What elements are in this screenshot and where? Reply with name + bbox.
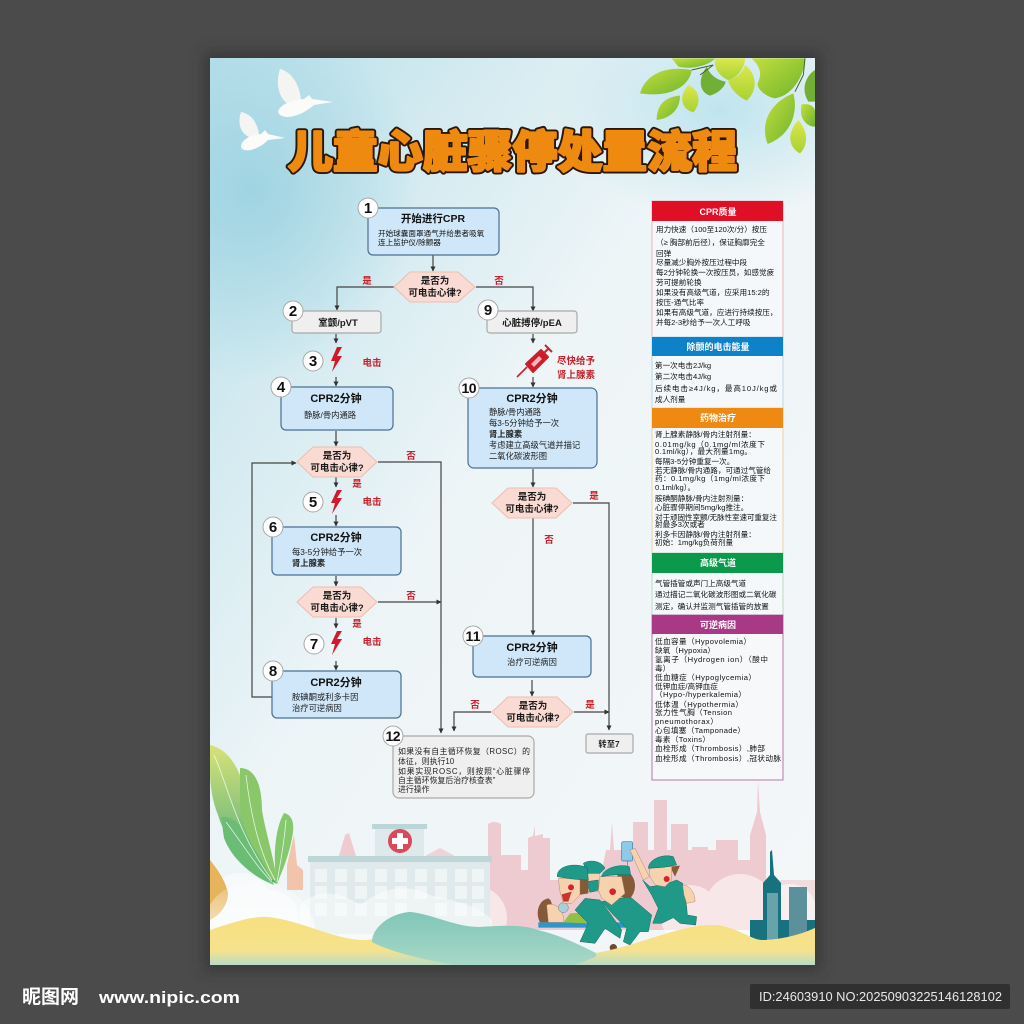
panel: reversible causes: （Hypo-/hyperkalemia） (655, 690, 746, 699)
panel: reversible causes: 可逆病因 (700, 619, 736, 630)
decision 4: 是 (589, 491, 599, 502)
step 12: ROSC: 进行操作 (398, 784, 430, 794)
decision 5: 否 (470, 700, 480, 711)
medic left: legs and torso (575, 898, 622, 943)
panel: shock energy (652, 337, 783, 408)
scene: green plant (210, 745, 293, 885)
step 3: shock: 电击 (362, 357, 382, 369)
panel: reversible causes: 心包填塞（Tamponade） (655, 725, 745, 735)
panel: CPR quality: 劳可提前轮换 (656, 277, 702, 287)
step 8: CPR: 胺碘酮或利多卡因 (292, 692, 358, 702)
step 9: asystole/PEA (478, 300, 577, 333)
step 8: CPR: 治疗可逆病因 (292, 703, 342, 713)
scene: hospital haze (300, 888, 492, 945)
panel: shock energy: 第二次电击4J/kg (655, 371, 711, 381)
step 3: shock (303, 347, 382, 372)
panel: drug therapy: 利多卡因静脉/骨内注射剂量： (655, 529, 756, 539)
step 1: start CPR: 1 (364, 200, 372, 217)
decision 1: 是 (362, 276, 372, 287)
panel: CPR quality: （≥ 胸部前后径），保证胸廓完全 (656, 237, 765, 247)
step 1: start CPR: 开始进行CPR (401, 212, 466, 225)
panel: shock energy: 除颤的电击能量 (686, 341, 750, 352)
title: 儿童心脏骤停处置流程 (288, 128, 737, 177)
panel: advanced airway: 气管插管或声门上高级气道 (655, 578, 747, 588)
scene: hospital (308, 824, 492, 934)
medic middle: legs and torso (602, 897, 652, 945)
panel: CPR quality: 并每2-3秒给予一次人工呼吸 (656, 317, 751, 327)
decision 5: 是 (585, 700, 595, 711)
panel: drug therapy: 0.1ml/kg），最大剂量1mg。 (655, 446, 752, 456)
panel: reversible causes: 缺氧（Hypoxia） (655, 645, 715, 655)
panel: reversible causes (652, 615, 783, 780)
step 7: shock (304, 631, 382, 655)
step 10: CPR: 静脉/骨内通路 (489, 407, 542, 417)
panel: CPR quality (652, 201, 783, 337)
step 2: VF/pVT (283, 301, 381, 333)
panel: reversible causes: 毒） (655, 663, 670, 673)
panel: CPR quality: CPR质量 (699, 206, 737, 217)
decision 2: 否 (406, 451, 416, 462)
scene: foreground yellow hill (596, 925, 815, 956)
decision 1: 是否为 (421, 275, 449, 287)
decision 1 (362, 272, 504, 302)
panel: drug therapy: 0.1ml/kg）。 (655, 483, 695, 492)
panel: CPR quality: 尽量减少胸外按压过程中段 (656, 257, 748, 267)
panel: drug therapy: 药物治疗 (700, 412, 736, 423)
panel: drug therapy: 射最多3次或者 (655, 519, 705, 529)
step 12: ROSC (383, 726, 534, 798)
panel: reversible causes: pneumothorax） (655, 717, 718, 726)
panel: drug therapy: 药：0.1mg/kg（1mg/ml浓度下 (655, 473, 765, 483)
medic right: fist (683, 885, 695, 903)
panel: advanced airway: 高级气道 (700, 557, 736, 568)
decision 3: 是 (352, 619, 362, 630)
scene: medical team with stretcher (538, 842, 697, 951)
panel: drug therapy: 若无静脉/骨内通路，可通过气管给 (655, 465, 771, 475)
step 10: CPR: 考虑建立高级气道并描记 (489, 440, 580, 450)
scene: pink city skyline (339, 780, 815, 930)
step 12: ROSC: 体征，则执行10 (398, 756, 455, 766)
step 11: CPR: 治疗可逆病因 (507, 657, 557, 667)
decision 1: 可电击心律? (408, 287, 462, 299)
decision 2 (297, 447, 416, 490)
step 10: CPR: 肾上腺素 (489, 429, 522, 439)
step 4: CPR: CPR2分钟 (310, 391, 362, 405)
step 11: CPR: CPR2分钟 (506, 640, 558, 654)
step 8: CPR: 8 (269, 663, 277, 680)
step 1: start CPR: 连上监护仪/除颤器 (378, 237, 441, 247)
panel: drug therapy: 每隔3-5分钟重复一次。 (655, 456, 734, 466)
flowchart connectors (252, 255, 609, 733)
step 6: CPR (263, 517, 401, 575)
decision 4: 是否为 (518, 491, 546, 503)
step 1: start CPR: 开始球囊面罩通气并给患者吸氧 (378, 228, 485, 238)
panel: advanced airway (652, 553, 783, 615)
step 6: CPR: 每3-5分钟给予一次 (292, 547, 362, 557)
panel: reversible causes: 血栓形成（Thrombosis）,肺部 (655, 743, 765, 753)
step 9: asystole/PEA: 心脏搏停/pEA (502, 317, 562, 329)
goto 7 box: 转至7 (598, 739, 620, 749)
goto 7 box (586, 734, 633, 753)
title: 儿童心脏骤停处置流程 (288, 128, 737, 177)
scene: orange tower (287, 835, 303, 890)
panel: CPR quality: 如果有高级气道，应进行持续按压， (656, 307, 778, 317)
medic right: head (648, 856, 680, 887)
step 10: CPR: 二氧化碳波形图 (489, 451, 547, 461)
step 12: ROSC: 如果实现ROSC，则按照“心脏骤停 (398, 766, 530, 776)
panel: advanced airway: 通过描记二氧化碳波形图或二氧化碳 (655, 589, 777, 599)
step 12: ROSC: 自主循环恢复后治疗核查表” (398, 775, 496, 785)
panel: drug therapy: 0.01mg/kg（0.1mg/ml浓度下 (655, 439, 765, 449)
panel: advanced airway: 测定，确认并监测气管插管的放置 (655, 601, 769, 611)
step 8: CPR: CPR2分钟 (310, 675, 362, 689)
panel: shock energy: 第一次电击2J/kg (655, 360, 711, 370)
medic left: head (557, 865, 588, 903)
decision 2: 是否为 (323, 450, 351, 462)
panel: reversible causes: 低体温（Hypothermia） (655, 699, 743, 709)
stretcher (538, 922, 627, 928)
panel: CPR quality: 每2分钟轮换一次按压员，如感觉疲 (656, 267, 775, 277)
panel: drug therapy: 心脏骤停期间5mg/kg推注。 (655, 502, 748, 512)
step 7: shock: 电击 (362, 636, 382, 648)
decision 3 (297, 587, 416, 630)
step 5: shock: 5 (309, 494, 317, 511)
step 9: asystole/PEA: 9 (484, 302, 492, 319)
decision 5: 是否为 (519, 700, 547, 712)
step 11: CPR (463, 626, 591, 677)
decoration: green leaves (640, 58, 815, 153)
panel: CPR quality: 按压-通气比率 (656, 297, 704, 307)
callout: give epinephrine (557, 355, 595, 381)
panel: reversible causes: 毒素（Toxins） (655, 734, 710, 744)
decision 3: 否 (406, 591, 416, 602)
callout: give epinephrine: 尽快给予 (557, 355, 595, 367)
scene: left haze (210, 880, 315, 945)
wheel (610, 944, 617, 951)
step 3: shock: 3 (309, 353, 317, 370)
step 5: shock (303, 490, 382, 514)
panel: drug therapy (652, 408, 783, 553)
footer watermark: site logo (22, 986, 240, 1008)
medic right: leg and torso (643, 880, 697, 925)
step 12: ROSC: 如果没有自主循环恢复（ROSC）的 (398, 746, 530, 756)
panel: CPR quality: 用力快速（100至120次/分）按压 (656, 224, 767, 234)
panel: CPR quality: 回弹 (656, 248, 672, 258)
decision 2: 可电击心律? (310, 462, 364, 474)
step 6: CPR: 6 (269, 519, 277, 536)
step 7: shock: 7 (310, 636, 318, 653)
step 11: CPR: 11 (466, 628, 481, 644)
step 10: CPR: CPR2分钟 (506, 391, 558, 405)
medic middle: head (598, 866, 635, 905)
panel: drug therapy: 初始：1mg/kg负荷剂量 (655, 537, 733, 547)
panel: reversible causes: 血栓形成（Thrombosis）,冠状动脉 (655, 753, 781, 763)
panel: reversible causes: 氢离子（Hydrogen ion）（酸中 (655, 654, 768, 664)
IV bag (622, 842, 633, 880)
decoration: doves (239, 69, 333, 150)
footer watermark: site logo: 昵图网 (22, 986, 79, 1008)
step 10: CPR: 10 (462, 380, 477, 396)
step 12: ROSC: 12 (386, 728, 401, 744)
scene: soft clouds (223, 873, 815, 930)
decision 4 (492, 488, 599, 546)
step 4: CPR: 静脉/骨内通路 (304, 410, 357, 420)
patient (538, 898, 587, 923)
panel: reversible causes: 低血糖症（Hypoglycemia） (655, 672, 756, 682)
medic right: raised arm (630, 848, 649, 880)
step 8: CPR (263, 661, 401, 718)
panel: drug therapy: 胺碘酮静脉/骨内注射剂量： (655, 493, 748, 503)
panel: reversible causes: 低钾血症/高钾血症 (655, 681, 718, 691)
scene: wheat at left edge (210, 860, 228, 920)
scene: yellow hills (210, 912, 815, 965)
step 6: CPR: 肾上腺素 (292, 558, 325, 568)
medic behind (583, 861, 605, 892)
step 6: CPR: CPR2分钟 (310, 530, 362, 544)
scene: teal towers (750, 850, 815, 945)
decision 4: 否 (544, 535, 554, 546)
step 5: shock: 电击 (362, 496, 382, 508)
decision 1: 否 (494, 276, 504, 287)
decision 5 (470, 697, 595, 727)
footer watermark: image id (750, 984, 1010, 1009)
panel: reversible causes: 张力性气胸（Tension (655, 707, 732, 717)
panel: reversible causes: 低血容量（Hypovolemia） (655, 636, 751, 646)
step 1: start CPR (358, 198, 499, 255)
callout: give epinephrine: 肾上腺素 (557, 369, 595, 381)
decision 3: 是否为 (323, 590, 351, 602)
decision 2: 是 (352, 479, 362, 490)
decision 4: 可电击心律? (505, 503, 559, 515)
poster shadow (204, 52, 821, 971)
step 2: VF/pVT: 室颤/pVT (318, 317, 358, 329)
step 2: VF/pVT: 2 (289, 303, 297, 320)
step 4: CPR (271, 377, 393, 430)
footer watermark: image id: ID:24603910 NO:20250903225146128102 (759, 989, 1002, 1004)
icon: epinephrine syringe (517, 345, 552, 377)
panel: drug therapy: 肾上腺素静脉/骨内注射剂量： (655, 429, 756, 439)
step 10: CPR: 每3-5分钟给予一次 (489, 418, 559, 428)
footer watermark: site logo: www.nipic.com (98, 988, 240, 1007)
panel: shock energy: 成人剂量 (655, 394, 686, 404)
step 4: CPR: 4 (277, 379, 286, 396)
step 10: CPR (459, 378, 597, 468)
poster background (210, 58, 815, 953)
panel: CPR quality: 如果没有高级气道，应采用15:2的 (656, 287, 770, 297)
panel: drug therapy: 对于顽固性室颤/无脉性室速可重复注 (655, 512, 777, 522)
decision 5: 可电击心律? (506, 712, 560, 724)
decision 3: 可电击心律? (310, 602, 364, 614)
panel: shock energy: 后续电击≥4J/kg，最高10J/kg或 (655, 383, 777, 393)
